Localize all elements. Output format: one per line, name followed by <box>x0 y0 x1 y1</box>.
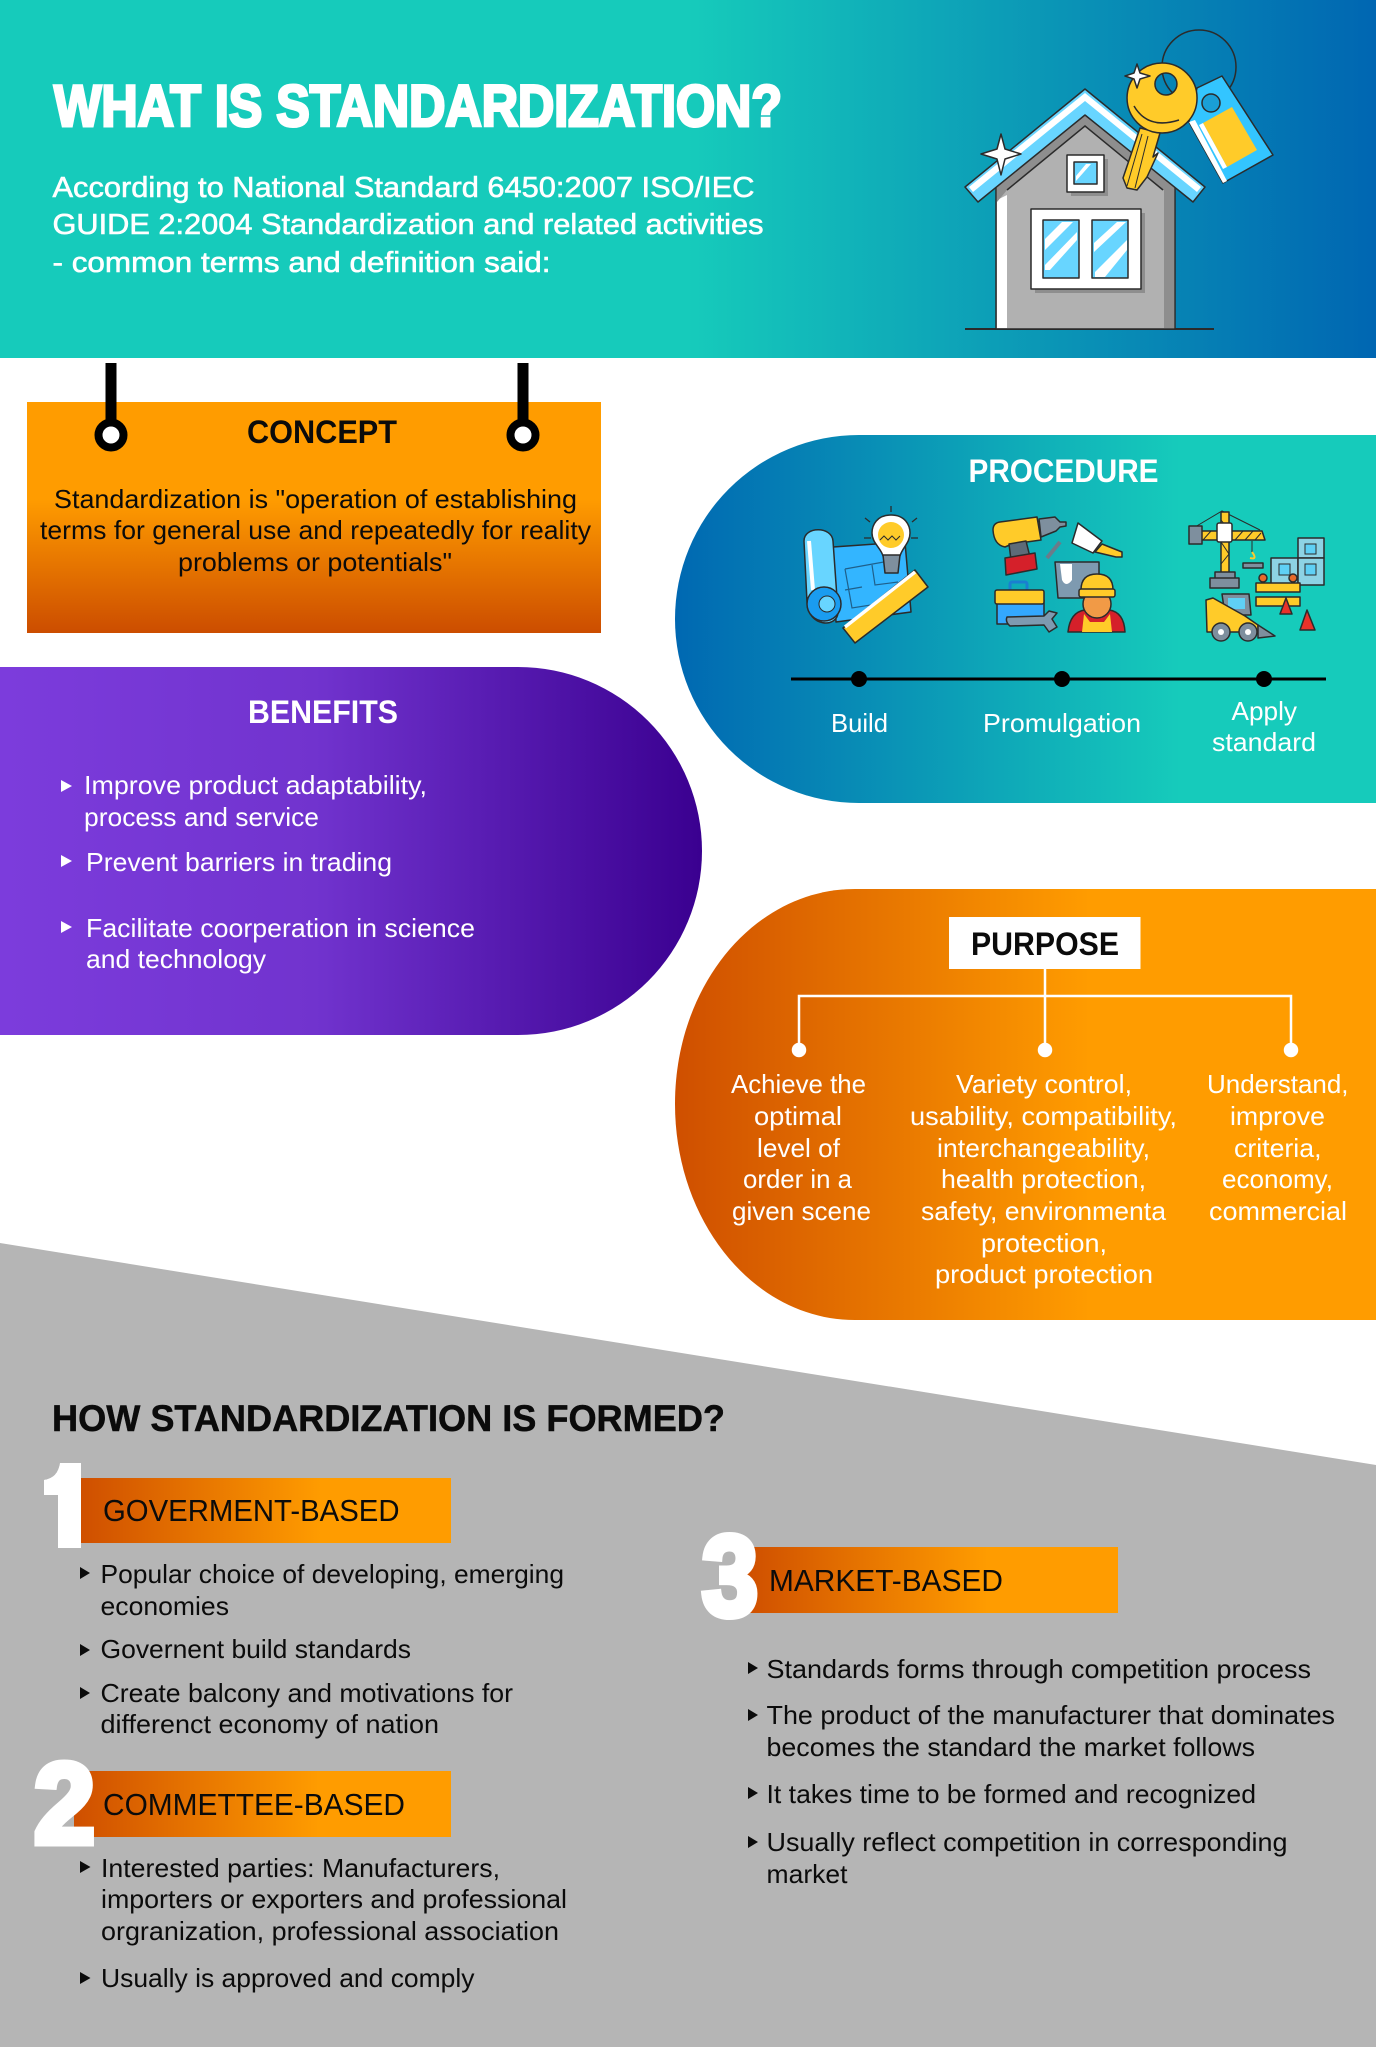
connector tree <box>793 969 1297 1056</box>
purpose column 1: optimal <box>754 1101 842 1131</box>
bullet: interested parties <box>80 1853 567 1946</box>
bullet: approved: Usually is approved and comply <box>101 1963 474 1993</box>
timeline <box>791 671 1326 687</box>
step labels: Apply <box>1232 696 1297 726</box>
purpose column 2: interchangeability, <box>937 1133 1150 1163</box>
header intro text: According to National Standard 6450:2007 ISO/IEC <box>52 172 754 204</box>
icon: tools and worker <box>993 517 1125 632</box>
heading: benefits: BENEFITS <box>248 694 398 730</box>
section 3: market-based <box>702 1513 1335 1889</box>
title: WHAT IS STANDARDIZATION? <box>54 74 782 139</box>
concept text <box>40 484 591 577</box>
bullet: adaptability <box>61 770 427 832</box>
header intro text: - common terms and definition said: <box>52 247 550 279</box>
purpose column 1: level of <box>757 1133 841 1163</box>
purpose column 1: order in a <box>743 1164 853 1194</box>
purpose column 2: product protection <box>935 1259 1153 1289</box>
banner 1: GOVERMENT-BASED <box>103 1493 400 1528</box>
banner 2 <box>74 1771 451 1837</box>
bullet: reflects competition <box>748 1827 1288 1889</box>
bullet: interested parties: orgranization, professional association <box>101 1916 559 1946</box>
bullet: government standards: Governent build standards <box>100 1634 411 1664</box>
hanger right <box>510 363 536 448</box>
hanger left <box>98 363 124 448</box>
bullet: competition process: Standards forms through competition process <box>766 1654 1311 1684</box>
step labels <box>831 696 1316 757</box>
bullet: developing economies: economies <box>100 1591 229 1621</box>
heading: concept: CONCEPT <box>247 414 397 450</box>
bullet: interested parties: importers or exporters and professional <box>101 1884 567 1914</box>
concept text: terms for general use and repeatedly for reality <box>40 515 591 545</box>
banner 3 <box>745 1547 1118 1613</box>
step labels: standard <box>1212 727 1316 757</box>
bullet: takes time: It takes time to be formed and recognized <box>766 1779 1256 1809</box>
purpose column 1: given scene <box>732 1196 871 1226</box>
bullet: cooperation: Facilitate coorperation in science <box>86 913 475 943</box>
panel: concept <box>27 363 601 633</box>
section 1: government-based <box>44 1463 562 1738</box>
purpose column 3 <box>1207 1069 1348 1226</box>
purpose column 2: Variety control, <box>956 1069 1132 1099</box>
purpose column 3: improve <box>1230 1101 1325 1131</box>
bullet: balcony and motivations: Create balcony and motivations for <box>100 1678 513 1708</box>
purpose column 3: criteria, <box>1234 1133 1322 1163</box>
bullet: balcony and motivations: differenct economy of nation <box>100 1709 439 1739</box>
number 3: 3 <box>702 1513 758 1640</box>
banner 3: MARKET-BASED <box>769 1563 1003 1598</box>
purpose column 3: Understand, <box>1207 1069 1348 1099</box>
banner 2: COMMETTEE-BASED <box>103 1787 405 1822</box>
panel: header <box>0 0 1376 358</box>
purpose column 2: protection, <box>981 1228 1107 1258</box>
purpose column 2: usability, compatibility, <box>910 1101 1177 1131</box>
gray section background <box>0 1243 1376 2047</box>
bullet: developing economies: Popular choice of developing, emerging <box>100 1559 564 1589</box>
icon: construction site <box>1189 511 1324 641</box>
bullet: developing economies <box>80 1559 564 1621</box>
banner 1 <box>81 1478 451 1543</box>
bullet: cooperation <box>61 913 475 974</box>
step labels: Build <box>831 708 888 738</box>
icon: blueprint <box>804 506 928 643</box>
panel: purpose <box>675 889 1376 1320</box>
bullet: reflects competition: Usually reflect competition in corresponding <box>766 1827 1288 1857</box>
heading: procedure: PROCEDURE <box>968 453 1158 489</box>
bullet: dominant manufacturer <box>748 1700 1335 1762</box>
bullet: adaptability: Improve product adaptability, <box>84 770 427 800</box>
bullet: cooperation: and technology <box>86 944 266 974</box>
concept text: Standardization is "operation of establishing <box>54 484 577 514</box>
bullet: reflects competition: market <box>766 1859 848 1889</box>
bullet: trading: Prevent barriers in trading <box>86 847 392 877</box>
bullet: adaptability: process and service <box>84 802 319 832</box>
purpose column 1 <box>731 1069 871 1226</box>
panel: procedure <box>675 435 1376 803</box>
heading: how standardization is formed: HOW STANDARDIZATION IS FORMED? <box>52 1398 725 1439</box>
heading box: purpose <box>949 917 1140 969</box>
purpose column 3: economy, <box>1222 1164 1333 1194</box>
section 2: committee-based <box>34 1741 567 1993</box>
bullet: dominant manufacturer: becomes the standard the market follows <box>766 1732 1255 1762</box>
purpose column 2: safety, environmenta <box>921 1196 1167 1226</box>
number 1: 1 <box>32 1440 92 1579</box>
step labels: Promulgation <box>983 708 1141 738</box>
bullet: interested parties: Interested parties: Manufacturers, <box>101 1853 500 1883</box>
purpose column 3: commercial <box>1209 1196 1347 1226</box>
purpose column 2: health protection, <box>941 1164 1146 1194</box>
purpose column 1: Achieve the <box>731 1069 866 1099</box>
heading box: purpose: PURPOSE <box>971 926 1119 962</box>
concept text: problems or potentials" <box>178 547 452 577</box>
bullet: dominant manufacturer: The product of the manufacturer that dominates <box>766 1700 1335 1730</box>
icon: house with keys <box>965 30 1273 329</box>
panel: benefits <box>0 667 702 1035</box>
bullet: balcony and motivations <box>80 1678 513 1739</box>
number 2: 2 <box>34 1741 95 1868</box>
header intro text: GUIDE 2:2004 Standardization and related activities <box>52 209 763 241</box>
purpose column 2 <box>910 1069 1177 1289</box>
header intro text <box>52 172 763 279</box>
